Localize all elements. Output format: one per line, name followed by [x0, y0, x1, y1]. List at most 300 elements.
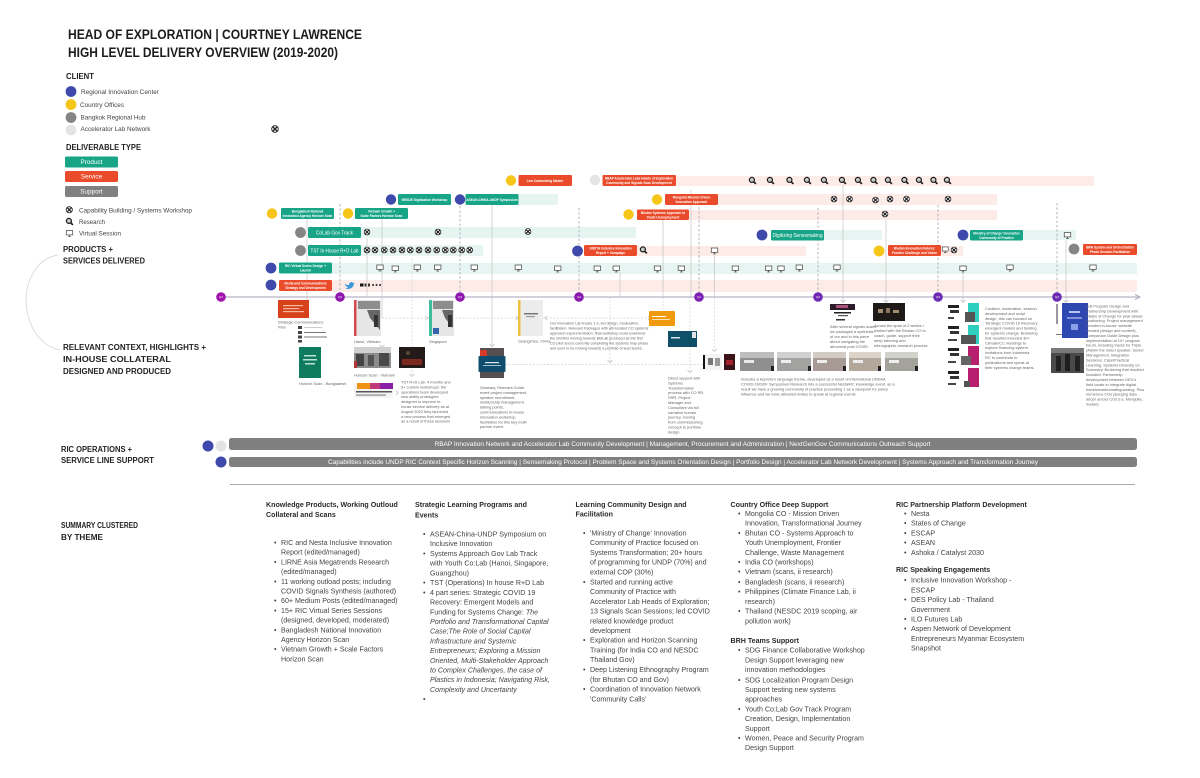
text: direct support note: concept to portfolio	[668, 424, 701, 430]
summary column: partnerships and speaking	[896, 501, 1028, 653]
deliverable: TST in house lab	[295, 245, 361, 256]
text: curation note: for systems change. Brokering	[985, 330, 1038, 336]
deliverable: Mongolia mission driven: Mongolia Mission Driven	[673, 196, 710, 200]
summary column: country office support: Creation, Design, Implementation	[745, 715, 850, 723]
collateral: Vietnam scan photo: Horizon Scan - Vietnam	[354, 372, 395, 378]
section label: operations	[61, 444, 155, 465]
text: curation note: publications and speak at	[985, 360, 1030, 365]
summary column: country office support: •	[738, 510, 741, 518]
summary column: strategic learning: Strategic Learning Programs and	[415, 501, 527, 509]
collateral: Singapore report cover: Singapore	[429, 339, 447, 344]
timeline axis: Q2	[816, 295, 820, 299]
deliverable: Bhutan systems approach	[623, 209, 689, 220]
timeline axis: Q3	[458, 295, 462, 299]
summary column: learning community: related knowledge product	[590, 617, 673, 625]
summary column: learning community: Thailand Gov)	[590, 656, 635, 664]
icon: twitter and medium marks	[344, 282, 381, 289]
summary column: partnerships and speaking: •	[904, 625, 907, 633]
summary column: knowledge products: 60+ Medium Posts (edited/managed)	[281, 597, 398, 605]
collateral: ethnography photo	[873, 303, 905, 321]
legend: activity icons	[66, 207, 192, 238]
workshop icon row: Mongolia	[831, 196, 951, 203]
collateral: orange card	[649, 311, 675, 326]
summary column: learning community: (for Bhutan CO and Gov)	[590, 676, 669, 684]
summary column: country office support: pollution work)	[745, 617, 791, 625]
workshop icon row: TST	[364, 247, 473, 253]
title: HIGH LEVEL DELIVERY OVERVIEW (2019-2020)	[68, 45, 338, 60]
collateral: Bangladesh horizon scan cover: Horizon Scan - Bangladesh	[299, 381, 346, 386]
summary column: strategic learning: Case;The Role of Social Capital	[430, 628, 531, 636]
summary column: strategic learning: TST (Operations) In house R+D Lab	[430, 579, 544, 587]
summary column: partnerships and speaking: •	[904, 520, 907, 528]
summary column: partnerships and speaking: •	[904, 596, 907, 604]
deliverable: inclusive innovation report	[572, 245, 637, 256]
summary column: learning community: •	[583, 666, 586, 674]
text: full program design note: Learning. Systems Diversity on	[1086, 362, 1140, 367]
deliverable: RBAP heads of exploration: RBAP Accelerator Labs Heads of Exploration	[605, 176, 673, 180]
deliverable: NRSDE digitization workshop: NRSDE Digitization Workshop	[402, 198, 447, 202]
timeline axis: Q2	[338, 295, 342, 299]
text: full program design note: (Admin the noted speaker, Senior	[1086, 348, 1144, 353]
collateral: Hanoi report cover	[354, 300, 381, 344]
summary column: country office support: Support testing new systems	[745, 686, 836, 694]
text: ethnography note: worked with the Bhutan CO to	[874, 328, 926, 333]
text: keynote note: COVID-19/SDF Symposium Research into a successful Nesta/RC knowledge event, as a	[741, 382, 895, 386]
summary column: strategic learning: Recovery: Emergent Models and	[430, 598, 533, 606]
summary column: country office support: •	[738, 558, 741, 566]
summary column: strategic learning: Entrepreneurs; Exploring a Mission	[430, 647, 540, 655]
text: direct support note: design.	[668, 429, 681, 434]
deliverable: Bhutan systems approach: Bhutan Systems Approach to	[641, 211, 685, 215]
legend: client: CLIENT	[66, 71, 95, 81]
pale duration bands	[332, 176, 1137, 292]
virtual session icon row	[377, 265, 1096, 272]
summary column: learning community: •	[583, 530, 586, 538]
deliverable: media and communications	[266, 280, 332, 291]
summary column: strategic learning	[415, 501, 552, 704]
text: TST lab note: a new process that emerged	[401, 414, 450, 419]
text: TST lab note: August 2020 they launched	[401, 409, 448, 414]
summary column: partnerships and speaking: Ashoka / Catalyst 2030	[911, 549, 984, 557]
text: signals note: After several signals scans	[830, 324, 876, 329]
text: full program design note: included: Partnership	[1086, 372, 1123, 377]
summary column: country office support: Philippines (Climate Finance Lab, ii	[745, 588, 856, 596]
text: innovation lab tracks note: Our Innovation Lab tracks 1-3, led design, moderation,	[550, 322, 639, 326]
deliverable: Bhutan innovation futures: Bhutan Innovation Futures:	[894, 246, 935, 250]
legend: client: Regional Innovation Center	[81, 89, 160, 96]
collateral: Singapore report cover	[429, 300, 454, 344]
summary column: country office support: •	[738, 734, 741, 742]
summary column: partnerships and speaking: ESCAP	[911, 586, 935, 594]
text: direct support note: journey, moving	[667, 415, 695, 420]
summary column: knowledge products: RIC and Nesta Inclusive Innovation	[281, 539, 392, 547]
summary column: knowledge products: Collateral and Scans	[266, 511, 336, 519]
summary column: knowledge products: •	[274, 607, 277, 615]
summary column: country office support: •	[738, 647, 741, 655]
summary column: knowledge products: COVID Signals Synthesis (authored)	[281, 588, 396, 596]
text: full program design note: field locale to integrate digital	[1086, 382, 1136, 387]
deliverable: low carbonizing master: Low Carbonizing Master	[527, 179, 564, 183]
text: TST lab note: TST R+D Lab: 4 months and	[401, 380, 451, 384]
text: ethnography note: ethnographic research process	[874, 343, 927, 348]
summary column: country office support: •	[738, 608, 741, 616]
summary column: learning community: •	[583, 578, 586, 586]
summary column: learning community: Facilitation	[576, 510, 613, 518]
RIC operations support bars	[202, 438, 1137, 468]
summary column: partnerships and speaking: •	[904, 616, 907, 624]
summary column: strategic learning: •	[423, 696, 426, 704]
text: symposium note: partner event.	[480, 424, 504, 429]
workshop icon row: CoLab	[364, 229, 531, 235]
summary column: learning community: 'Community Calls'	[590, 695, 646, 703]
summary column: learning community: Community of Practice with	[590, 588, 676, 596]
summary column: partnerships and speaking: Inclusive Innovation Workshop -	[911, 577, 1012, 585]
summary column: strategic learning: Funding for Systems Change: The	[430, 608, 538, 616]
legend: activity icons: Research	[79, 219, 105, 226]
summary column: strategic learning: Infrastructure and Systemic	[430, 637, 517, 645]
summary column: country office support: •	[738, 568, 741, 576]
summary column: strategic learning: •	[423, 579, 426, 587]
collateral: Guangzhou report cover: Guangzhou, China	[518, 338, 551, 344]
summary column: partnerships and speaking: •	[904, 549, 907, 557]
section label: products and services: PRODUCTS +	[63, 244, 113, 254]
section label: relevant context: IN-HOUSE COLLATERAL	[63, 354, 171, 364]
summary column: partnerships and speaking: ESCAP	[911, 529, 935, 537]
timeline axis: Q3	[936, 295, 940, 299]
summary column: partnerships and speaking: DES Policy Lab - Thailand	[911, 596, 994, 604]
summary column: strategic learning: 4 part series: Strategic COVID 19	[430, 589, 535, 597]
summary column: strategic learning: Oriented, Multi-Stakeholder Approach	[430, 657, 548, 665]
text: curation note: Invitations from Indonesia	[985, 350, 1030, 355]
summary column: country office support	[730, 501, 867, 752]
text: full program design note: positioning. Project management	[1086, 318, 1144, 323]
summary column: strategic learning: Portfolio and Transformational Capital	[430, 618, 549, 626]
summary column: partnerships and speaking: •	[904, 539, 907, 547]
text: ethnography note: coach, guide, support their	[874, 333, 921, 338]
collateral: states of change book	[1056, 303, 1088, 338]
text: curation note: RC to contribute to	[985, 355, 1017, 360]
icons: Bhutan futures	[942, 247, 957, 253]
text: curation note: development and script	[985, 311, 1026, 316]
text: curation note: design, this can focused on	[985, 316, 1032, 321]
summary column: country office support: SDG Localization Program Design	[745, 676, 853, 684]
deliverable: Bhutan systems approach: Youth Unemployment	[647, 216, 680, 220]
summary column: partnerships and speaking: Nesta	[911, 510, 930, 518]
deliverable: Vietnam horizon scan: Scale Factors Horizon Scan	[361, 214, 403, 218]
summary column: strategic learning: Plastics in Indonesia; Navigating Risk,	[430, 676, 550, 684]
text: signals note: abnormal post COVID	[830, 344, 868, 349]
summary column: knowledge products: 15+ RIC Virtual Series Sessions	[281, 607, 382, 615]
summary column: knowledge products: •	[274, 626, 277, 634]
summary column: partnerships and speaking: Government	[911, 606, 950, 614]
legend: client: Bangkok Regional Hub	[80, 114, 146, 122]
summary column: learning community: Training (for India CO and NESDC	[590, 646, 699, 654]
text: symposium note: event project management,	[480, 390, 527, 395]
legend: client: Country Offices	[80, 102, 125, 109]
summary column: partnerships and speaking: •	[904, 529, 907, 537]
text: TST lab note: house service delivery as at	[401, 404, 450, 409]
text: innovation lab tracks note: CO pilot and is currently completing the systems map phase	[550, 342, 648, 346]
summary column: learning community: of programming for UNDP (70%) and	[590, 559, 707, 567]
text: direct support note: Manager and	[668, 400, 691, 405]
text: symposium note: innovation workshop	[480, 414, 515, 419]
text: innovation lab tracks note: the shortlist moving towards BktLab produced as the first	[550, 336, 643, 340]
legend: deliverable type: DELIVERABLE TYPE	[66, 142, 141, 152]
deliverable: RBAP heads of exploration: Community and Signals Scan Development	[606, 181, 673, 185]
summary column: country office support: approaches	[745, 696, 783, 704]
summary column: knowledge products: Horizon Scan	[281, 655, 324, 663]
summary column: country office support: Design Support	[745, 744, 794, 752]
connector arrowheads	[304, 300, 1068, 395]
text: symposium note: relationship management,	[480, 400, 525, 405]
text: direct support note: Transformation	[668, 385, 694, 390]
section label: summary: BY THEME	[61, 532, 103, 542]
text: full program design note: forum, including tracks for Triple	[1086, 343, 1141, 348]
text: direct support note: Systems	[668, 380, 683, 385]
text: signals note: about navigating the	[830, 339, 865, 344]
legend: deliverable type: Support	[80, 188, 103, 196]
summary column: partnerships and speaking: RIC Partnership Platform Development	[896, 501, 1028, 509]
text: full program design note: States of Change for year-ahead	[1086, 313, 1142, 318]
summary column: learning community: •	[583, 686, 586, 694]
summary column: country office support: Youth Unemployment, Frontier	[745, 539, 842, 547]
text: direct support note: process with CO RR,	[668, 390, 704, 395]
collateral: dark lab photo	[399, 347, 425, 368]
summary column: knowledge products: Vietnam Growth + Scale Factors	[281, 646, 384, 654]
summary column: knowledge products	[266, 501, 400, 663]
timeline axis	[216, 292, 1140, 302]
deliverable: ministry of change: Community of Practice	[979, 236, 1014, 240]
text: full program design note: adopt across COs (i.e. Mongolia,	[1086, 397, 1143, 402]
text: full program design note: transformation/safeguarding. Plus	[1086, 387, 1144, 392]
legend: deliverable type	[65, 142, 141, 197]
summary column: country office support: Mongolia CO - Mission Driven	[745, 510, 839, 518]
section label: operations: SERVICE LINE SUPPORT	[61, 455, 155, 465]
summary column: learning community: Systems Transformation; 20+ hours	[590, 549, 703, 557]
summary column: knowledge products: Knowledge Products, Working Outloud	[266, 501, 398, 509]
collateral: communications plan	[278, 300, 323, 330]
summary column: country office support: Innovation, Transformational Journey	[745, 520, 862, 528]
summary column: knowledge products: Bangladesh National Innovation	[281, 626, 381, 634]
deliverable: RBAP heads of exploration	[590, 175, 676, 186]
summary column: country office support: Design Support leveraging new	[745, 656, 844, 664]
workshop icon: Bhutan	[882, 211, 888, 217]
RIC operations support bars: Capabilities include UNDP RIC Context Specific Horizon Scanning | Sensemaking Protocol | Problem Space and Systems Orientation Design | Portfolio Design | Accelerator Lab Network Development | Systems Approach and Transformation Journey	[328, 459, 1039, 466]
research icon row	[749, 177, 951, 184]
summary column: learning community: Accelerator Lab Heads of Exploration;	[590, 598, 710, 606]
summary column: partnerships and speaking: RIC Speaking Engagements	[896, 566, 990, 574]
summary column: strategic learning: ASEAN-China-UNDP Symposium on	[430, 530, 546, 538]
summary column: knowledge products: •	[274, 539, 277, 547]
text: ethnography note: Across the span of 2 weeks I	[874, 323, 924, 328]
text: TST lab note: new ability prototypes	[401, 394, 438, 399]
summary column: strategic learning: •	[423, 550, 426, 558]
summary column: strategic learning: Complexity and Uncertainty	[430, 686, 517, 694]
summary column: learning community: •	[583, 637, 586, 645]
deliverable: ASEAN China UNDP symposium: ASEAN-CHINA-UNDP Symposium	[466, 198, 518, 202]
collateral: small collage	[703, 354, 735, 370]
text: full program design note: Sessions, Case/Practical	[1086, 357, 1129, 362]
summary column: partnerships and speaking: ASEAN	[911, 539, 935, 547]
summary column: partnerships and speaking: •	[904, 510, 907, 518]
summary column: knowledge products: •	[274, 558, 277, 566]
text: full program design note: Partnership Development with	[1086, 308, 1138, 313]
virtual icon: ministry of change	[1064, 232, 1071, 238]
collateral: event photo strip	[740, 352, 918, 371]
summary column: partnerships and speaking: Snapshot	[911, 645, 941, 653]
summary column: country office support: research)	[745, 598, 775, 606]
text: signals note: we packaged a synthesis	[830, 329, 874, 334]
summary column: strategic learning: to Complex Challenges, the case of	[430, 666, 543, 674]
summary column: country office support: •	[738, 676, 741, 684]
summary column: knowledge products: LIRNE Asia Megatrends Research	[281, 558, 389, 566]
collateral: calendar strip	[354, 383, 393, 398]
text: direct support note: Consultant via full	[668, 405, 699, 410]
summary column: country office support: Women, Peace and Security Program	[745, 734, 864, 742]
summary column: knowledge products: 11 working outload posts; including	[281, 578, 391, 586]
summary column: country office support: Thailand (NESDC 2019 scoping, air	[745, 608, 858, 616]
deliverable: Bangladesh horizon scan: Innovation Agency Horizon Scan	[283, 214, 332, 218]
collateral: communications plan: Plan	[278, 324, 286, 330]
legend: client: Accelerator Lab Network	[80, 126, 151, 133]
summary column: knowledge products: Report (edited/managed)	[281, 549, 360, 557]
legend: client	[66, 71, 160, 135]
summary column: strategic learning: •	[423, 530, 426, 538]
text: direct support note: Direct support with	[668, 376, 700, 380]
text: direct support note: from commissioning	[668, 420, 703, 425]
text: curation note: Curation, moderation, session	[985, 306, 1037, 311]
summary column: partnerships and speaking: States of Change	[911, 520, 966, 528]
summary column: country office support: innovation methodologies	[745, 666, 826, 674]
deliverable: inclusive innovation report: Report + Campaign	[596, 251, 625, 255]
text: full program design note: created (design and content),	[1086, 328, 1137, 333]
text: TST lab note: as a result of these sessions	[401, 419, 450, 424]
text: full program design note: implementation at 10+ program	[1086, 338, 1140, 343]
collateral: teal card	[668, 331, 697, 347]
stray workshop icon	[272, 126, 278, 132]
text: full program design note: numerous COs pipeging data	[1086, 392, 1137, 397]
text: curation note: their systems change teams.	[985, 365, 1035, 370]
text: TST lab note: 5+ custom workshops: the	[401, 384, 446, 389]
summary column: country office support: SDG Finance Collaborative Workshop	[745, 647, 865, 655]
deliverable: inclusive innovation report: UNDTA Inclusive Innovation	[589, 246, 632, 250]
section label: relevant context	[63, 342, 206, 376]
text: symposium note: speaker recruitment,	[480, 395, 515, 400]
text: keynote note: Includes a keynote's language theme, developed as a result of international UNDAA	[741, 376, 886, 382]
text: keynote note: influence and we have attracted invites to speak at regional events	[741, 392, 856, 396]
legend: deliverable type: Service	[81, 174, 103, 180]
collateral: session posters	[948, 303, 979, 387]
text: innovation lab tracks note: approach experimentation; final workshop cross-examined	[550, 332, 645, 336]
collateral: media list	[298, 326, 327, 342]
research and virtual icons: report	[640, 247, 718, 254]
section label: products and services: SERVICES DELIVERED	[63, 256, 145, 266]
summary column: learning community: 13 Signals Scan Sessions; led COVID	[590, 608, 710, 616]
deliverable: TST in house lab: TST In House R+D Lab	[310, 248, 359, 254]
deliverable: digitizing sensemaking: Digitizing Sensemaking	[772, 233, 823, 239]
deliverable: NRSDE digitization workshop	[386, 194, 451, 205]
summary column: learning community: external COP (30%)	[590, 568, 653, 576]
deliverable: Mongolia mission driven: Innovation Approach	[676, 200, 707, 204]
summary column: partnerships and speaking: ILO Futures Lab	[911, 616, 962, 624]
summary column: country office support: •	[738, 578, 741, 586]
deliverable: Vietnam horizon scan: Vietnam Growth +	[368, 210, 395, 214]
deliverable: Mongolia mission driven	[652, 194, 718, 205]
timeline axis: Q1	[697, 295, 701, 299]
deliverable: BRH system and orchestration	[1069, 244, 1137, 255]
deliverable: digitizing sensemaking	[757, 230, 824, 240]
summary column: knowledge products: •	[274, 646, 277, 654]
summary column: country office support: Youth Co:Lab Gov Track Program	[745, 705, 851, 713]
text: symposium note: communications in-house	[480, 410, 524, 414]
connector lines to collateral	[307, 185, 1066, 375]
summary column: strategic learning: Inclusive Innovation	[430, 540, 492, 548]
summary column: learning community: Coordination of Innovation Network	[590, 686, 701, 694]
summary column: learning community: Learning Community Design and	[576, 501, 687, 509]
collateral: Guangzhou report cover	[518, 300, 551, 344]
section label: products and services	[63, 244, 145, 266]
summary column: learning community: Community of Practice focused on	[590, 539, 698, 547]
summary column: country office support: Bangladesh (scans, ii research)	[745, 578, 844, 586]
summary column: country office support: Vietnam (scans, ii research)	[745, 568, 833, 576]
summary column: learning community	[576, 501, 712, 703]
deliverable: ministry of change	[958, 230, 1023, 240]
quarter marker dashed lines	[340, 203, 1057, 297]
text: full program design note: Summary. Brokering that resulted	[1086, 367, 1144, 372]
summary column: strategic learning: Guangzhou)	[430, 569, 469, 577]
section label: summary	[61, 520, 138, 542]
deliverable: Bangladesh horizon scan: Bangladesh National	[292, 210, 323, 214]
deliverable: Bhutan innovation futures: Frontier Challenge and Vision	[892, 251, 937, 255]
text: curation note: 'Strategic COVID 19 Recovery:	[985, 321, 1039, 326]
collateral: group photo	[1051, 348, 1084, 373]
text: full program design note: included in-house: website	[1086, 323, 1132, 328]
summary column: knowledge products: (edited/managed)	[281, 568, 337, 576]
summary column: learning community: 'Ministry of Change' Innovation	[590, 530, 687, 538]
deliverable: low carbonizing master	[506, 175, 572, 186]
summary column: country office support: Support	[745, 725, 770, 733]
title	[68, 27, 362, 60]
text: direct support note: narrative human	[668, 410, 696, 415]
summary column: strategic learning: •	[423, 589, 426, 597]
deliverable: BRH system and orchestration: BRH System and Orchestration	[1086, 246, 1134, 250]
text: TST lab note: operations team developed	[401, 389, 448, 394]
timeline axis: Q4	[1055, 295, 1059, 299]
legend: activity icons: Virtual Session	[79, 230, 121, 238]
text: symposium note: Glossary, Relevant Guide,	[480, 385, 525, 390]
text: curation note: Climate/CC meetings to	[985, 340, 1026, 345]
summary column: country office support: •	[738, 588, 741, 596]
timeline axis: Q1	[219, 295, 223, 299]
summary column: learning community: Started and running active	[590, 578, 673, 586]
summary column: learning community: Exploration and Horizon Scanning	[590, 637, 697, 645]
deliverable: RIC virtual series: RIC Virtual Series Design +	[285, 264, 326, 268]
section label: summary: SUMMARY CLUSTERED	[61, 520, 138, 530]
section label: relevant context: RELEVANT CONTEXT, HIGHLIGHTS +	[63, 342, 206, 352]
deliverable: CoLab gov track	[295, 227, 361, 238]
summary column: country office support: Bhutan CO - Systems Approach to	[745, 529, 853, 537]
summary column: knowledge products: (designed, developed, moderated)	[281, 617, 389, 625]
collateral: symposium artwork	[478, 348, 506, 378]
summary column: knowledge products: Agency Horizon Scan	[281, 636, 349, 644]
summary column: partnerships and speaking: Entrepreneurs Myanmar Ecosystem	[911, 635, 1024, 643]
summary column: knowledge products: •	[274, 578, 277, 586]
deliverable: Bhutan innovation futures	[874, 245, 941, 256]
summary column: country office support: •	[738, 705, 741, 713]
text: symposium note: talking points,	[480, 405, 504, 410]
text: curation note: emergent models and funding	[985, 326, 1036, 331]
collateral: communications plan: Strategic Communications	[278, 320, 323, 324]
